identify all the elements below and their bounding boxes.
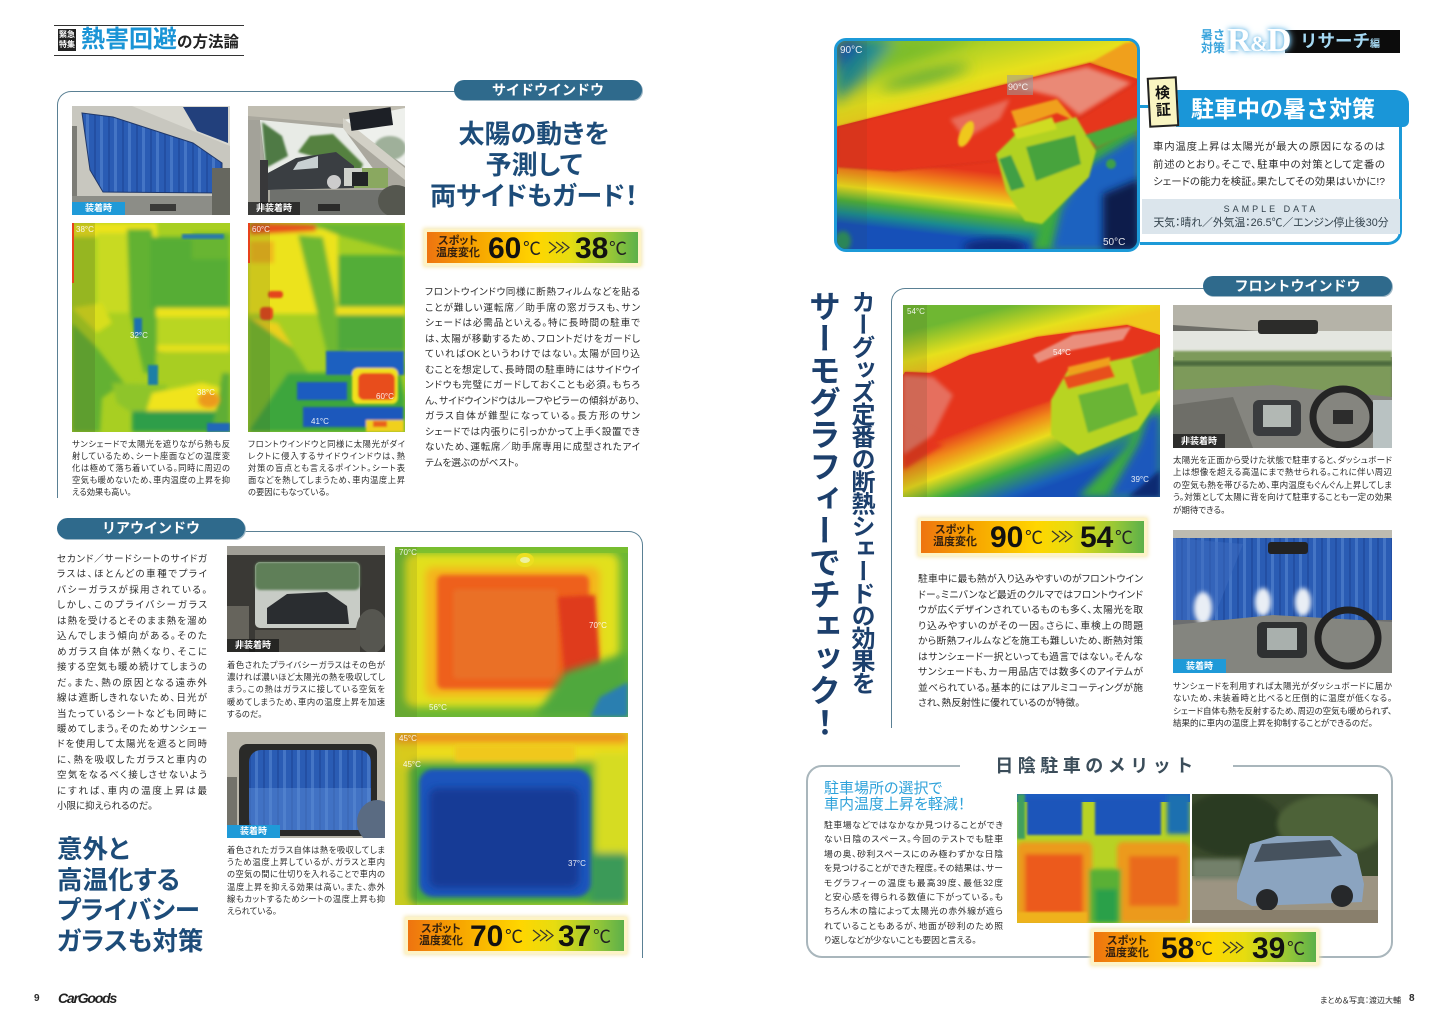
body text: side window: ないため、運転席／助手席専用に成型されたアイ [425,442,640,453]
body text: rear window: しかし、このプライバシーガラス [57,600,207,611]
body text: shade parking: ない日陰のスペース。今回のテストでも駐車 [824,834,1003,844]
body text: side window: ていればOKというわけではない。太陽が回り込 [425,349,640,360]
label: SAMPLE DATA: SAMPLE DATA [1224,204,1318,214]
body text: rear window: ドを使用して太陽光を遮ると同時 [57,739,207,750]
caption: tinted glass: するのだ。 [227,709,262,719]
thermal image: rear without shade [395,547,628,717]
photo: shade fitted side window [72,106,230,215]
photo: rear window with shade [227,732,385,838]
body text: rear window: にすれば、車内の温度上昇は最 [57,786,207,797]
title band: 駐車中の暑さ対策: 駐車中の暑さ対策 [1191,96,1375,122]
caption: dashboard with shade: シェード自体も熱を反射するため、周辺の空気も暖められず、 [1173,706,1392,716]
thermal image: shaded parking [1017,794,1190,923]
panel: 検証 駐車中の暑さ対策 [1140,76,1409,245]
body text: rear window: だ。また、熱の原因となる遠赤外 [57,678,207,689]
body text: rear window: めガラス自体が熱くなり、そこに [57,647,207,658]
heading: 太陽の動きを予測して両サイドもガード!: 両サイドもガード！ [430,181,638,211]
tag: 検証: 証 [1155,102,1171,119]
body text: side window: シェードでは内張りに引っかかって上手く設置でき [425,427,640,438]
spot temperature badge: 90 to 54: スポット [935,524,975,536]
label: 非装着時 [227,639,279,652]
body text: rear window: 込んでしまう傾向がある。そのた [57,631,207,642]
caption: tinted glass: 暖めてしまうため、車内の温度上昇を加速 [227,697,385,707]
caption: without shade: レクトに侵入するサイドウインドウは、熱 [248,451,405,461]
heading: 太陽の動きを予測して両サイドもガード!: 予測して [486,150,582,180]
body text: shade parking: モグラフィーの温度も最高39度、最低32度 [824,878,1003,888]
body text: rear window: バシーガラスが採用されている。 [57,585,207,596]
caption: with shade: 化は極めて落ち着いている。同時に周辺の [72,463,230,473]
thermal image: main dashboard [834,38,1140,252]
caption: shade on tinted glass: 線もカットするためシートの温度上昇も抑 [227,894,385,904]
tag: 検証: 検 [1155,85,1170,102]
body text: front window: 並べられている。基本的にはアルミコーティングが施 [918,683,1143,694]
tab: サイドウインドウ: サイドウインドウ [492,82,604,98]
label: 装着時 [1173,659,1226,673]
heading: 太陽の動きを予測して両サイドもガード!: 太陽の動きを [458,119,610,149]
spot 39°C: 39°C [1131,475,1149,484]
body text: rear window: 暖めてしまう。そのためサンシェー [57,724,207,735]
tab: フロントウインドウ [1203,276,1392,296]
body text: rear window: 線は遮断しきれないため、日光が [57,693,207,704]
spot temperature badge: 60 to 38: ℃ [523,239,539,259]
temperature mark 60°C: 60°C [252,225,270,234]
spot temperature badge: 90 to 54: ℃ [1025,528,1041,548]
spot temperature badge: 60 to 38: 38 [575,232,608,265]
body text: front window: から断熱フィルムなどを施工も難しいため、断熱対策 [918,636,1143,647]
body text: side window: ガラス自体が錐型になっている。長方形のサン [425,411,640,422]
spot 50°C: 50°C [1103,237,1125,248]
body text: front window: 駐車中に最も熱が入り込みやすいのがフロントウイン [918,574,1143,585]
body text: rear window: に、熱を吸収したガラスと車内の [57,755,207,766]
caption: shade on tinted glass: 温度上昇を抑える効果は高い。また、赤外 [227,882,385,892]
heading: 日陰駐車のメリット [960,755,1233,777]
label: 非装着時: 非装着時 [235,640,271,650]
temperature mark 54°C: 54°C [907,307,925,316]
body text: shade parking: を見つけることができた程度。その結果は、サー [824,863,1003,873]
body text: front window: り込みやすいのがその一因。さらに、車検上の問題 [918,621,1143,632]
spot temperature badge: 90 to 54: 54 [1080,521,1113,554]
credit: まとめ＆写真：渡辺大輔 [1320,996,1401,1005]
caption: dashboard without shade: 上は想像を超える高温にまで熱せられる。これに伴い周辺 [1173,467,1392,477]
caption: without shade: の要因にもなっている。 [248,487,330,497]
panel: rear window [57,518,643,958]
body text: side window: ことが難しい運転席／助手席の窓ガラスも、サン [425,303,640,314]
panel: 日陰駐車のメリット [806,756,1393,968]
section label: 暑さ対策 R&D リサーチ編 [1201,22,1400,59]
spot temperature badge: 70 to 37: 70 [470,920,503,953]
spot temperature badge: 90 to 54: ℃ [1115,528,1131,548]
temperature mark mid 70°C: 70°C [589,621,607,630]
heading: 太陽の動きを予測して両サイドもガード! [430,119,638,211]
caption: dashboard without shade: 太陽光を正面から受けた状態で駐車すると、ダッシュボード [1173,455,1392,465]
caption: with shade: 空気も暖めないため、車内温度の上昇を抑 [72,475,230,485]
body text: front window: はサンシェード一択といっても過言ではない。そんな [918,652,1143,663]
title: リサーチ編: リサーチ編 [1300,31,1380,51]
label: 装着時: 装着時 [85,203,112,213]
caption: with shade [72,439,230,497]
body text: shade parking: れていることもあるが、地面が砂利のため照 [824,921,1003,931]
spot temperature badge: 58 to 39: 58 [1161,932,1194,965]
caption: dashboard without shade [1173,455,1392,515]
header: 熱害回避の方法論 [54,25,244,56]
body text: side window: は、太陽が移動するため、フロントだけをガードし [425,334,640,345]
badge: 緊急特集 [58,29,76,51]
label: 装着時: 装着時 [240,826,267,836]
badge: 緊急特集: 緊急 [59,30,75,39]
body text: side window: テムを選ぶのがベスト。 [425,458,519,469]
caption: tinted glass: 着色されたプライバシーガラスはその色が [227,660,385,670]
heading: 意外と高温化するプライバシーガラスも対策 [57,836,203,956]
spot temperature badge: 90 to 54: 温度変化 [933,536,977,548]
thermal image: with shade [72,223,230,432]
spot temperature badge: 70 to 37 [408,920,624,951]
spot temperature badge: 60 to 38: 60 [488,232,521,265]
temperature marks: 38°C [76,225,94,234]
temperature mark 45°C: 45°C [399,734,417,743]
caption: dashboard with shade: サンシェードを利用すれば太陽光がダッシュボードに届か [1173,681,1392,691]
caption: shade on tinted glass [227,845,385,916]
photo: car parked under tree [1192,794,1378,923]
body text: side window: フロントウインドウ同様に断熱フィルムなどを貼る [425,287,640,298]
spot temperature badge: 60 to 38: ℃ [609,239,625,259]
intro text: 前述のとおり。そこで、駐車中の対策として定番の [1153,160,1385,171]
body text: front window [918,574,1143,709]
body text: rear window: 当たっているシートなども同時に [57,709,207,720]
caption: tinted glass: まう。この熱はガラスに接している空気を [227,684,385,694]
column: カーグッズ定番の断熱シェードの効果を: カーグッズ定番の断熱シェードの効果を [847,290,874,693]
label: 非装着時: 非装着時 [1181,436,1217,446]
body text: side window: ンドウも完璧にガードしておくことも必須。もちろ [425,380,640,391]
caption: with shade: える効果も高い。 [72,487,131,497]
spot temperature badge: 58 to 39: 39 [1252,932,1285,965]
tab: フロントウインドウ: フロントウインドウ [1234,278,1360,294]
body text: rear window: 小限に抑えられるのだ。 [57,801,153,812]
thermal spot 41°C: 41°C [311,417,329,426]
label: 装着時: 装着時 [1186,661,1213,671]
body text: rear window: は熱を受けるとそのまま熱を溜め [57,616,207,627]
heading: 意外と高温化するプライバシーガラスも対策: 意外と [57,836,129,864]
heading text: 熱害回避の方法論 [81,26,239,53]
thermal spot 32°C: 32°C [130,331,148,340]
spot temperature badge: 70 to 37: スポット [421,923,461,935]
subheading: 駐車場所の選択で: 車内温度上昇を軽減！ [824,796,965,813]
small label: 暑さ対策: 暑さ [1201,28,1225,42]
page number: 8: 8 [1409,993,1415,1004]
weather data: 天気：晴れ／外気温：26.5℃／エンジン停止後30分 [1153,217,1389,229]
body text: rear window: 空気をなるべく接しさせないよう [57,770,207,781]
body text: side window: ん、サイドウインドウはルーフやピラーの傾斜があり、 [425,396,640,407]
heading: 日陰駐車のメリット: 日陰駐車のメリット [995,756,1198,776]
caption: shade on tinted glass: えられている。 [227,906,277,916]
temperature mark 56°C: 56°C [429,703,447,712]
spot temperature badge: 60 to 38 [427,232,638,263]
intro text: 車内温度上昇は太陽光が最大の原因になるのは [1153,142,1385,153]
panel: front window [891,276,1393,728]
caption: shade on tinted glass: うため温度上昇しているが、ガラスと車内 [227,857,385,867]
spot temperature badge: 70 to 37: ℃ [505,927,521,947]
body text: shade parking: 駐車場などではなかなか見つけることができ [824,820,1003,830]
tag: 検証 [1147,76,1179,128]
caption: dashboard without shade: う。対策として太陽に背を向けて駐車することも一定の効果 [1173,492,1392,502]
body text: rear window: 接する空気も暖め続けてしまうの [57,662,207,673]
body text: shade parking: と安心感を得られる数値に下がっている。も [824,892,1003,902]
caption: with shade: サンシェードで太陽光を遮りながら熱も反 [72,439,230,449]
spot temperature badge: 70 to 37: 温度変化 [419,935,463,947]
heading: 意外と高温化するプライバシーガラスも対策: プライバシー [57,897,200,925]
body text: rear window: セカンド／サードシートのサイドガ [57,554,207,565]
body text: side window: シェードは必需品といえる。特に長時間の駐車で [425,318,640,329]
vertical headline [805,290,876,738]
body text: front window: され、熱反射性に優れているのが特徴。 [918,698,1080,709]
caption: dashboard without shade: が期待できる。 [1173,505,1225,515]
caption: shade on tinted glass: の空気の間に仕切りを入れることで車内の [227,869,385,879]
heading: 意外と高温化するプライバシーガラスも対策: ガラスも対策 [57,928,203,956]
intro text [1153,141,1385,188]
spot temperature badge: 90 to 54 [921,521,1144,553]
spot temperature badge: 70 to 37: ℃ [593,927,609,947]
small label: 暑さ対策: 対策 [1201,41,1225,55]
badge: 緊急特集: 特集 [59,40,75,49]
page number: 9: 9 [34,993,40,1004]
spot temperature badge: 58 to 39: ℃ [1195,939,1211,959]
spot temperature badge: 90 to 54: 90 [990,521,1023,554]
subheading: 駐車場所の選択で [824,780,965,813]
title band: 駐車中の暑さ対策 [1176,90,1409,127]
body text: rear window: ラスは、ほとんどの車種でプライ [57,569,207,580]
photo: dashboard without shade [1173,305,1392,448]
label: 装着時 [72,202,125,215]
label: 装着時 [227,825,280,838]
thermal image: without shade [248,223,405,432]
spot temperature badge: 58 to 39: スポット [1107,935,1147,947]
caption: with shade: 射しているため、シート座面などの温度変 [72,451,230,461]
spot 90°C: 90°C [1008,82,1028,92]
caption: dashboard with shade: 結果的に車内の温度上昇を抑制することができるのだ。 [1173,718,1373,728]
spot 54°C: 54°C [1053,348,1071,357]
spot temperature badge: 70 to 37: 37 [558,920,591,953]
caption: without shade: フロントウインドウと同様に太陽光がダイ [248,439,405,449]
tab: リアウインドウ: リアウインドウ [102,520,200,536]
body text: rear window [57,554,207,812]
temperature mark 90°C: 90°C [840,45,862,56]
body text: side window: むことを想定して、長時間の駐車時にはサイドウイ [425,365,640,376]
temperature mark 70°C: 70°C [399,548,417,557]
caption: without shade: 面などを熱してしまうため、車内温度上昇 [248,475,405,485]
body text: shade parking [824,820,1003,945]
body text: shade parking: 場の奥、砂利スペースにのみ極わずかな日陰 [824,849,1003,859]
logo: CarGoods: CarGoods [58,990,116,1006]
body text: front window: サンシェードも、カー用品店では数多くのアイテムが [918,667,1143,678]
temperature mark mid 45°C: 45°C [403,760,421,769]
photo: rear window without shade [227,546,385,652]
body text: shade parking: ちろん木の陰によって太陽光の赤外線が遮ら [824,906,1003,916]
thermal image: front window [903,305,1160,497]
caption: without shade: 対策の盲点とも言えるポイント。シート表 [248,463,405,473]
spot temperature badge: 58 to 39 [1094,932,1316,962]
label: 非装着時 [248,202,300,215]
subheading: 駐車場所の選択で: 駐車場所の選択で [824,780,942,797]
temperature mark 37°C: 37°C [568,859,586,868]
small label: 暑さ対策 [1201,28,1225,55]
spot temperature badge: 58 to 39: 温度変化 [1105,947,1149,959]
photo: dashboard with shade [1173,530,1392,673]
caption: dashboard with shade [1173,681,1392,728]
spot temperature badge: 58 to 39: ℃ [1287,939,1303,959]
label: 非装着時: 非装着時 [256,203,292,213]
body text: side window [425,286,640,469]
caption: dashboard with shade: ないため、未装着時と比べると圧倒的に温度が低くなる。 [1173,693,1392,703]
label: 非装着時 [1173,434,1225,448]
sample data band [1142,199,1400,234]
photo: side window without shade [248,106,405,215]
body text: shade parking: り返しなどが少ないことも要因と言える。 [824,935,976,945]
caption: dashboard without shade: の空気も熱を帯びるため、車内温度もぐんぐん上昇してしま [1173,480,1392,490]
thermal spot 38°C: 38°C [197,388,215,397]
caption: tinted glass: 濃ければ濃いほど太陽光の熱を吸収してし [227,672,385,682]
spot temperature badge: 60 to 38: スポット [438,235,478,247]
intro text: シェードの能力を検証。果たしてその効果はいかに!? [1153,177,1385,188]
caption: tinted glass [227,660,385,719]
tab: リアウインドウ [57,518,245,539]
caption: without shade [248,439,405,497]
connector line [1139,105,1151,108]
panel: side window [57,80,644,498]
logo: R&D: R&D [1227,22,1290,59]
spot temperature badge: 60 to 38: 温度変化 [436,247,480,259]
column: サーモグラフィーでチェック！: サーモグラフィーでチェック！ [805,290,841,738]
caption: shade on tinted glass: 着色されたガラス自体は熱を吸収してしま [227,845,385,855]
heading: 意外と高温化するプライバシーガラスも対策: 高温化する [57,867,180,895]
body text: front window: ドー。ミニバンなど最近のクルマではフロントウインド [918,590,1143,601]
thermal image: rear with shade [395,733,628,905]
tab: サイドウインドウ [454,80,642,100]
thermal spot 60°C: 60°C [376,392,394,401]
body text: front window: ウが広くデザインされているものも多く、太陽光を取 [918,605,1143,616]
